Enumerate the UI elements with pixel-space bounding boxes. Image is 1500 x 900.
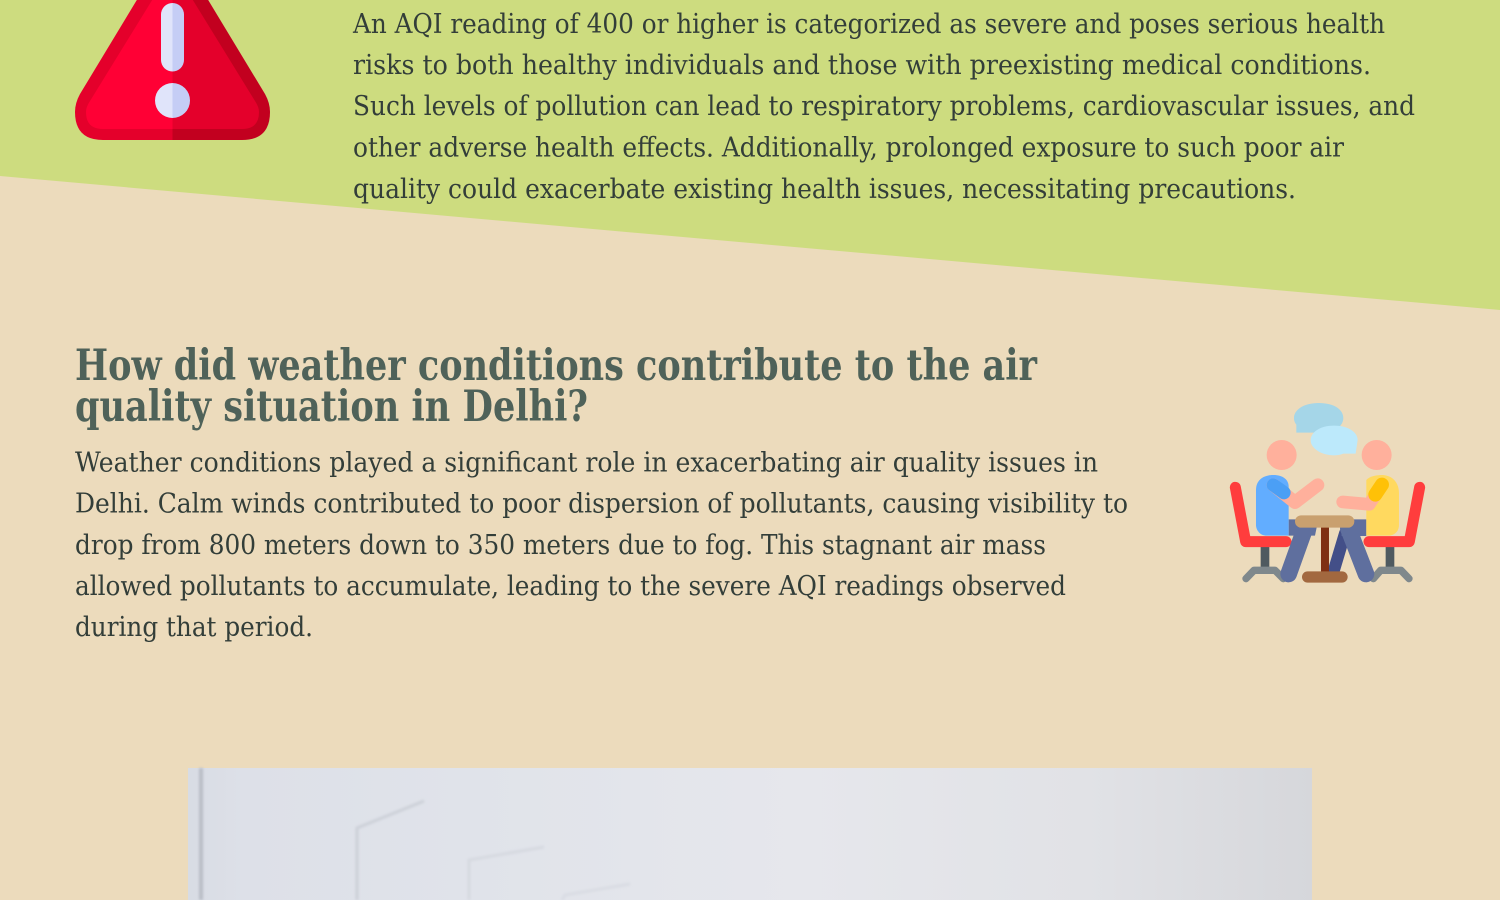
text block: weather explanation: during that period. <box>75 612 313 643</box>
text block: weather explanation: Delhi. Calm winds contributed to poor dispersion of pollutants, causing visibility to <box>75 488 1128 520</box>
text block: weather explanation: drop from 800 meters down to 350 meters due to fog. This stagnant air mass <box>75 530 1046 561</box>
table <box>1295 515 1354 583</box>
icon: two people talking at a table <box>1235 403 1420 583</box>
person: right <box>1334 440 1399 574</box>
photo: foggy street scene <box>188 768 1312 900</box>
speech bubble: back <box>1294 403 1343 433</box>
panel: green slanted banner <box>0 0 1500 310</box>
chair: right <box>1369 487 1420 579</box>
text block: weather explanation <box>75 448 1128 643</box>
speech bubble: front <box>1311 426 1358 455</box>
heading: weather conditions question <box>75 341 1038 432</box>
text block: weather explanation: allowed pollutants to accumulate, leading to the severe AQI readings observed <box>75 571 1066 602</box>
text block: AQI severity: quality could exacerbate existing health issues, necessitating precautions. <box>353 174 1296 205</box>
text block: weather explanation: Weather conditions played a significant role in exacerbating air quality issues in <box>75 448 1098 478</box>
text block: AQI severity: other adverse health effects. Additionally, prolonged exposure to such poor air <box>353 132 1344 164</box>
text block: AQI severity: risks to both healthy individuals and those with preexisting medical conditions. <box>353 50 1371 81</box>
text block: AQI severity <box>352 9 1415 205</box>
text block: AQI severity: Such levels of pollution can lead to respiratory problems, cardiovascular issues, and <box>353 91 1415 122</box>
heading: weather conditions question: How did weather conditions contribute to the air <box>75 341 1038 391</box>
person: left <box>1256 440 1318 574</box>
icon: warning triangle <box>75 0 270 140</box>
chair: left <box>1235 487 1286 579</box>
heading: weather conditions question: quality situation in Delhi? <box>75 382 588 432</box>
text block: AQI severity: An AQI reading of 400 or higher is categorized as severe and poses serious health <box>352 9 1385 40</box>
